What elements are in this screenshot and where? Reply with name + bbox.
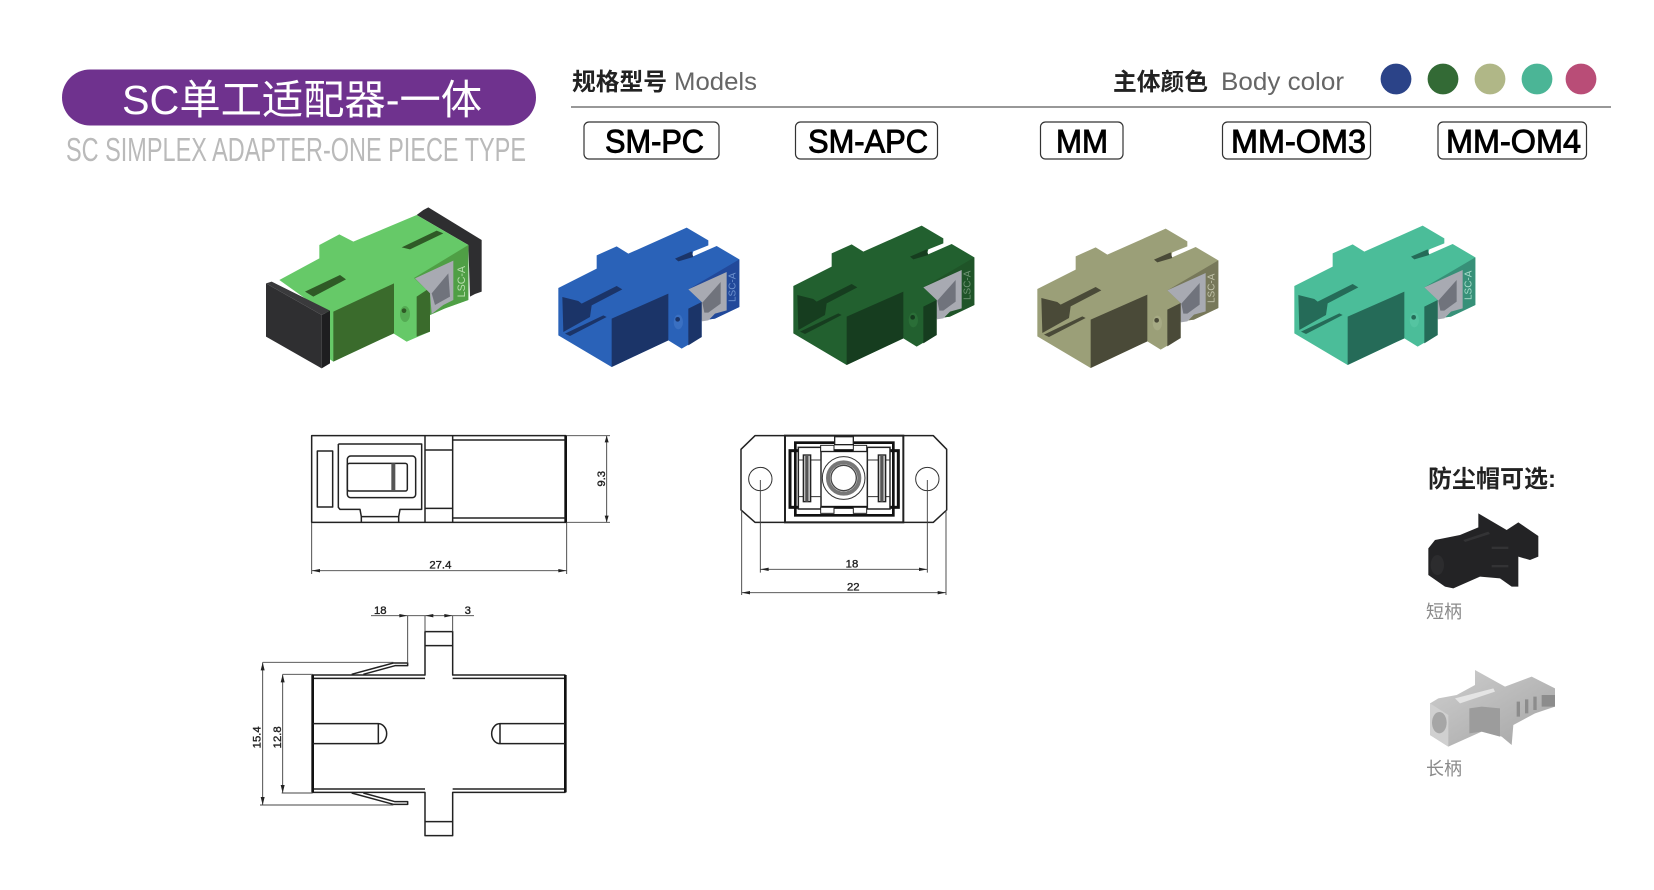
drawing: top view with dimensions: [252, 605, 565, 836]
model tag: MM: MM: [1056, 124, 1108, 160]
model tag: SM-APC: SM-APC: [808, 124, 928, 160]
models heading: 规格型号: [572, 69, 667, 96]
models heading: [572, 68, 757, 96]
adapter: blue: [558, 228, 739, 367]
adapter: dark green: [793, 226, 974, 365]
adapter: aqua: LSC-A: [1464, 270, 1475, 300]
icon: short-handle black dust cap: [1428, 513, 1538, 588]
adapter: aqua: [1294, 226, 1475, 365]
models heading: Models: [674, 68, 757, 96]
title pill: [62, 70, 536, 126]
drawing: end view with dimensions: 22: [847, 582, 860, 594]
model tag: SM-PC: SM-PC: [605, 124, 704, 160]
drawing: top view with dimensions: 18: [374, 605, 387, 617]
adapter: khaki: [1037, 229, 1218, 368]
icon: long-handle grey dust cap: [1430, 670, 1555, 747]
body color swatches: [1381, 64, 1596, 94]
drawing: side view with dimensions: 9.3: [596, 471, 608, 487]
dust cap heading: 防尘帽可选:: [1428, 466, 1556, 493]
adapter: blue: LSC-A: [728, 272, 739, 302]
label: short handle: 短柄: [1426, 602, 1462, 622]
drawing: top view with dimensions: 3: [465, 605, 471, 617]
drawing: end view with dimensions: 18: [846, 559, 858, 571]
adapter: khaki: LSC-A: [1207, 273, 1218, 303]
drawing: top view with dimensions: 15.4: [252, 726, 264, 748]
model tag: MM-OM4: MM-OM4: [1446, 124, 1581, 160]
drawing: side view with dimensions: [312, 436, 610, 574]
adapter: dark green: LSC-A: [963, 270, 974, 300]
body color heading: [1113, 68, 1344, 96]
drawing: end view with dimensions: [741, 436, 947, 595]
title pill: SC单工适配器-一体: [122, 77, 482, 123]
body color heading: Body color: [1221, 68, 1344, 96]
english subtitle: SC SIMPLEX ADAPTER-ONE PIECE TYPE: [66, 131, 526, 168]
drawing: top view with dimensions: 12.8: [272, 726, 284, 748]
model tag: MM-OM3: MM-OM3: [1231, 124, 1366, 160]
model tag: MM: [1040, 122, 1123, 160]
adapter: lime green with black dust caps: LSC-A: [456, 265, 468, 297]
label: long handle: 长柄: [1426, 759, 1462, 779]
adapter: lime green with black dust caps: [266, 207, 482, 368]
drawing: side view with dimensions: 27.4: [429, 559, 451, 571]
body color heading: 主体颜色: [1113, 69, 1208, 96]
